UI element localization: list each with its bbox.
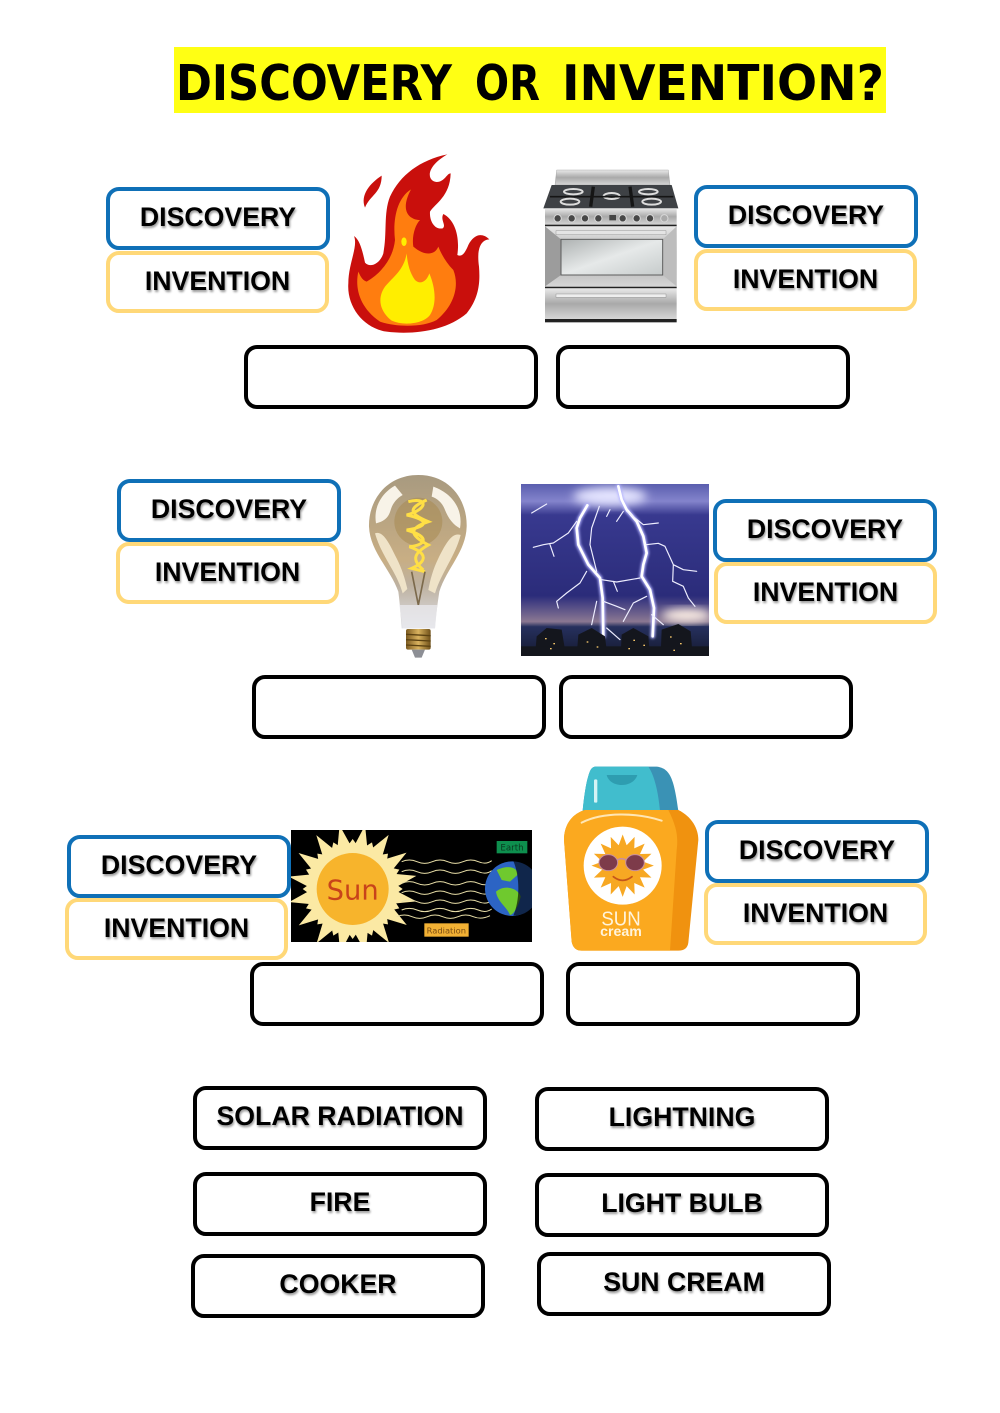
icon: sun cream bottle [564,766,698,951]
answer box: fire [244,345,538,409]
diagram: solar radiation: Earth [500,844,524,854]
word: sun cream: SUN CREAM [603,1267,765,1297]
diagram: solar radiation [291,830,532,942]
word: lightning: LIGHTNING [609,1102,755,1132]
option: invention: INVENTION [155,557,300,587]
diagram: solar radiation: Sun [327,875,379,906]
option: invention [65,898,288,960]
option: invention: INVENTION [743,898,888,928]
icon: sun cream bottle: cream [600,923,642,939]
icon: light bulb [369,475,467,658]
option: discovery [67,835,291,898]
option: invention [116,542,339,604]
icon: cooker [543,170,678,322]
option: discovery [694,185,918,248]
option: discovery: DISCOVERY [747,514,903,544]
option: invention [704,883,927,945]
option: invention: INVENTION [733,264,878,294]
title: DISCOVERY [176,55,452,112]
option: invention [106,251,329,313]
option: discovery: DISCOVERY [140,202,296,232]
answer box: lightning [559,675,853,739]
choices: solar radiation [65,835,291,960]
word: solar radiation: SOLAR RADIATION [216,1101,464,1131]
answer box: light bulb [252,675,546,739]
diagram: solar radiation: Radiation [427,925,466,935]
option: discovery: DISCOVERY [728,200,884,230]
word: cooker [191,1254,485,1318]
choices: sun cream [704,820,929,945]
word: solar radiation [193,1086,487,1150]
word: cooker: COOKER [279,1269,397,1299]
answer box: cooker [556,345,850,409]
choices: lightning [713,499,937,624]
option: discovery [705,820,929,883]
word: light bulb: LIGHT BULB [601,1188,763,1218]
option: discovery [713,499,937,562]
option: invention [714,562,937,624]
option: invention: INVENTION [753,577,898,607]
answer box: sun cream [566,962,860,1026]
option: discovery [117,479,341,542]
option: discovery: DISCOVERY [151,494,307,524]
option: discovery: DISCOVERY [739,835,895,865]
word: light bulb [535,1173,829,1237]
word: fire [193,1172,487,1236]
option: invention: INVENTION [104,913,249,943]
icon: fire [348,154,490,333]
title: OR [475,55,540,112]
choices: cooker [694,185,918,311]
title [174,47,886,113]
option: discovery: DISCOVERY [101,850,257,880]
icon: sun cream bottle: SUN [601,907,641,930]
word: sun cream [537,1252,831,1316]
photo: lightning [521,484,709,656]
answer box: solar radiation [250,962,544,1026]
word: fire: FIRE [310,1187,370,1217]
option: invention: INVENTION [145,266,290,296]
word: lightning [535,1087,829,1151]
option: invention [694,249,917,311]
option: discovery [106,187,330,250]
choices: light bulb [116,479,341,604]
choices: fire [106,187,330,313]
